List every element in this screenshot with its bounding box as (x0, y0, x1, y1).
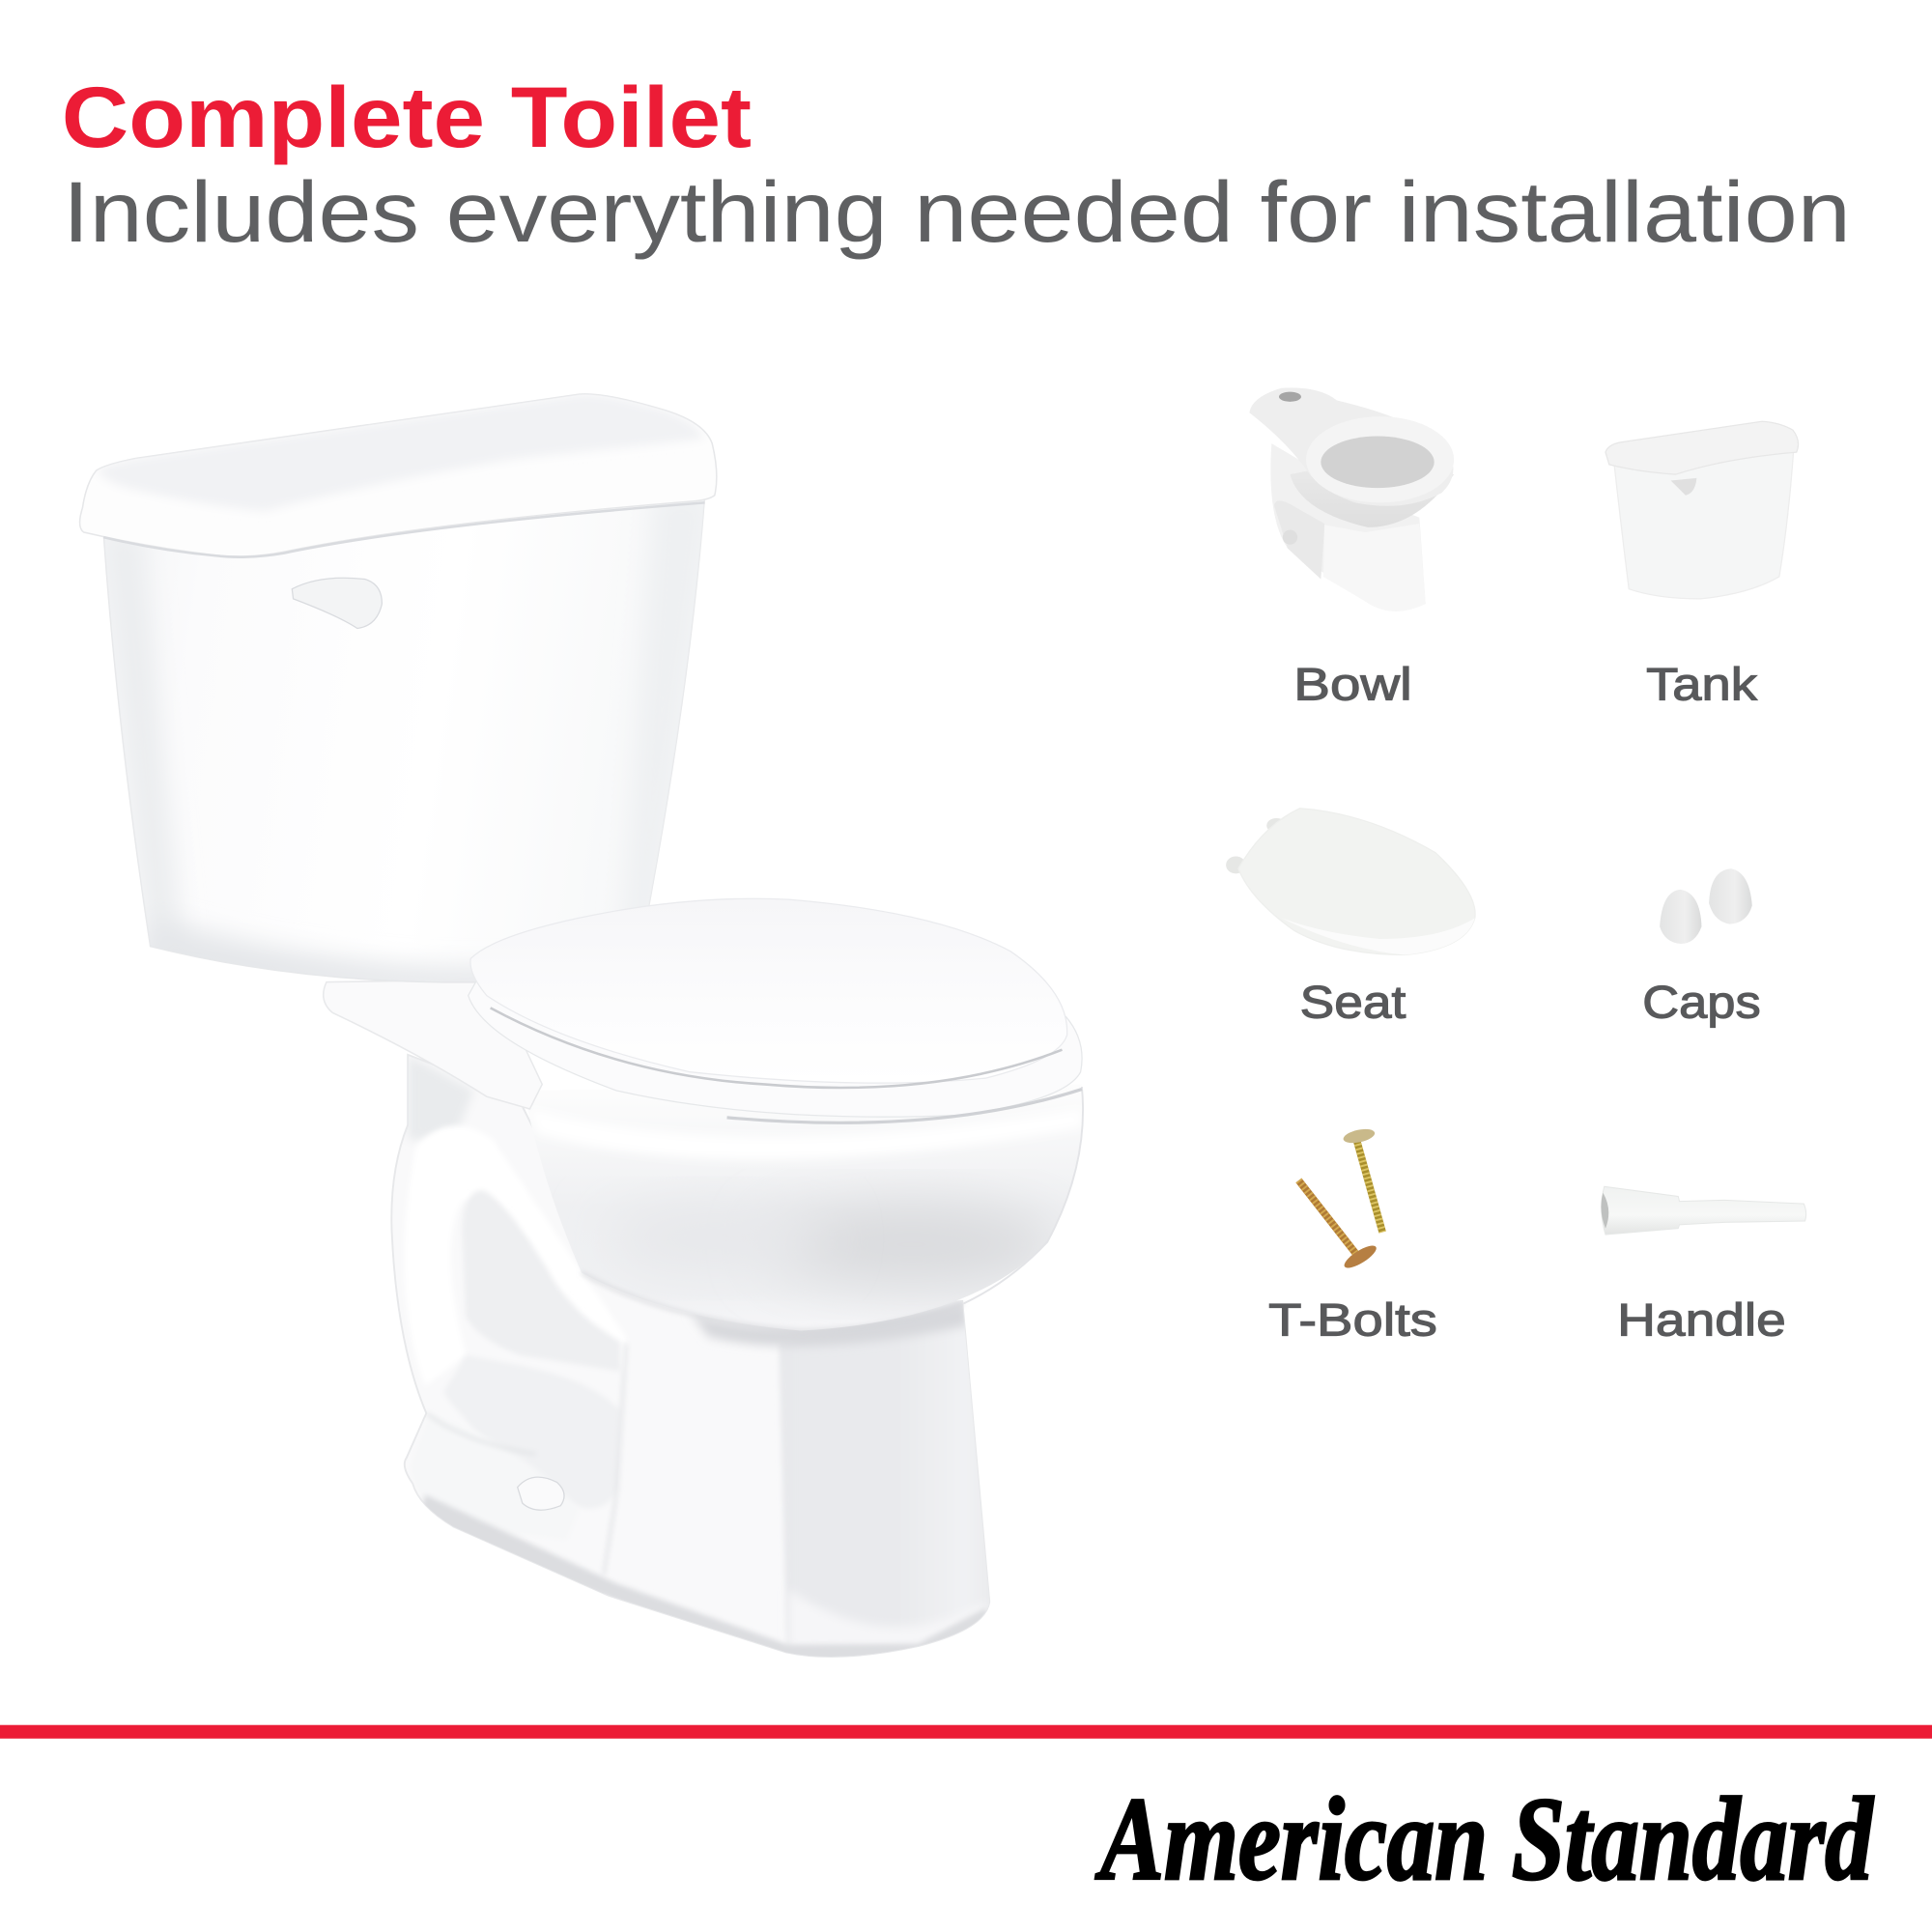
part: t-bolts (1268, 1126, 1437, 1347)
toilet base and trapway (391, 1055, 998, 1669)
subtitle: Includes everything needed for installation (63, 163, 1851, 260)
tank lid (80, 394, 717, 557)
bowl (524, 1084, 1083, 1331)
handle label: Handle (1617, 1295, 1786, 1347)
part: seat (1226, 809, 1475, 1029)
seat lid (470, 898, 1067, 1088)
trapway upper recess (462, 1190, 621, 1372)
trapway arch (423, 1125, 462, 1144)
tank body (103, 493, 715, 998)
handle image (1601, 1186, 1806, 1235)
floor bolt boss (518, 1477, 564, 1510)
inner neck shading (408, 1059, 471, 1139)
part: caps (1642, 868, 1761, 1029)
bowl label: Bowl (1293, 659, 1412, 710)
tank label: Tank (1646, 659, 1757, 710)
part: handle (1601, 1186, 1806, 1347)
red divider bar (0, 1725, 1932, 1739)
foot ridge (411, 1414, 579, 1540)
seat label: Seat (1300, 978, 1406, 1029)
trapway lower recess (448, 1360, 616, 1505)
left pedestal face (604, 1341, 786, 1658)
flush lever (292, 578, 382, 629)
bowl rim line (727, 1090, 1082, 1122)
caps label: Caps (1642, 978, 1761, 1029)
under-bowl shadow (690, 1301, 967, 1347)
t-bolts label: T-Bolts (1268, 1295, 1437, 1347)
part: bowl (1249, 387, 1454, 710)
tank image (1605, 421, 1799, 599)
bowl lip line (582, 1273, 963, 1331)
bowl right outline (963, 1087, 1083, 1303)
seat ring (469, 974, 1082, 1117)
part: tank (1605, 421, 1799, 710)
bowl image (1249, 387, 1454, 611)
neck between tank and bowl (324, 980, 542, 1109)
seat image (1226, 809, 1475, 955)
t-bolts image (1298, 1126, 1382, 1272)
main image: complete toilet (80, 394, 1083, 1669)
caps image (1660, 868, 1752, 944)
title: Complete Toilet (62, 69, 752, 165)
right pedestal face (779, 1330, 988, 1627)
